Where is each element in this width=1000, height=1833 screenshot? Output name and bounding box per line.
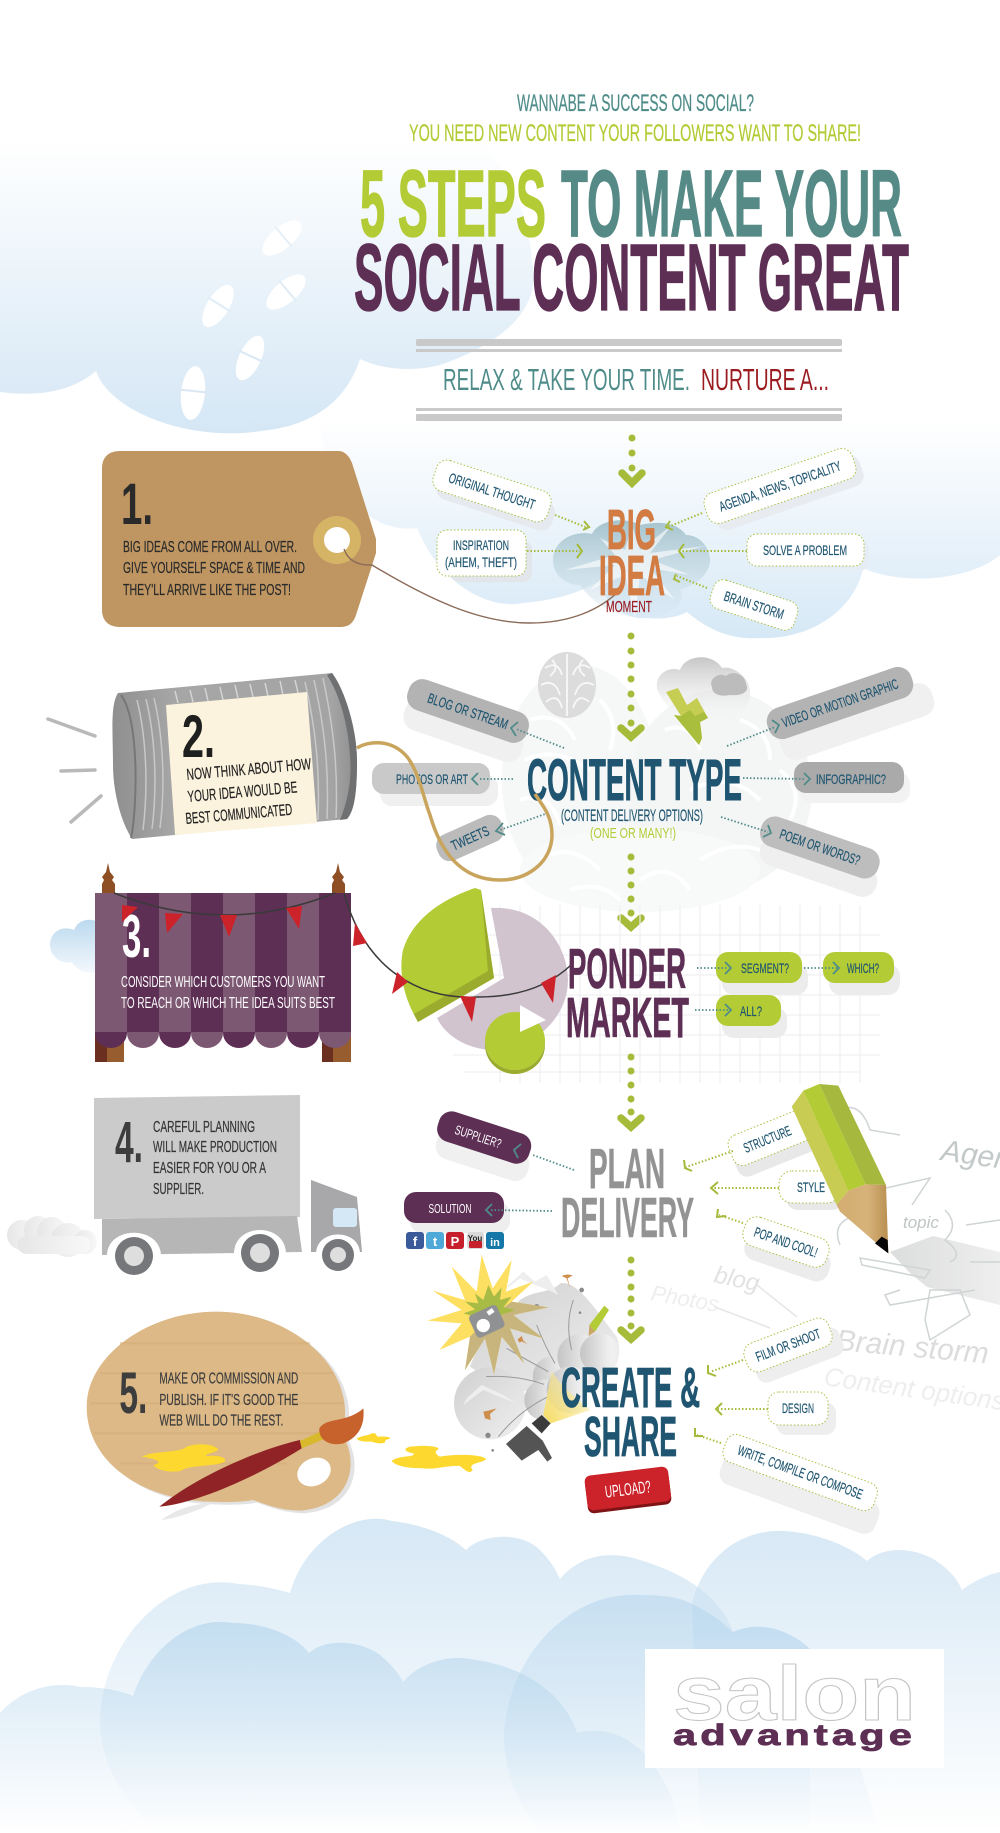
text: PONDER — [568, 937, 686, 1001]
content type heading: (ONE OR MANY!) — [590, 825, 676, 842]
step 4 text: EASIER FOR YOU OR A — [153, 1160, 266, 1177]
button: upload: UPLOAD? — [604, 1477, 652, 1502]
title — [354, 151, 909, 331]
arrow: to plan delivery — [621, 1054, 641, 1127]
bubble: film or shoot: FILM OR SHOOT — [753, 1325, 823, 1365]
bubble: agenda news topicality — [701, 444, 867, 535]
step 1 tag — [102, 451, 376, 627]
icon: storm cloud with lightning — [657, 657, 750, 745]
pill: which: WHICH? — [847, 960, 879, 976]
bubble: agenda news topicality: AGENDA, NEWS, TOPICALITY — [717, 457, 844, 514]
content type heading — [527, 748, 742, 842]
step 5 number: 5. — [119, 1362, 147, 1426]
bubble: infographic: INFOGRAPHIC? — [816, 771, 886, 787]
social icons: in — [490, 1237, 500, 1249]
sketch background: blog — [712, 1261, 762, 1297]
bubble: style — [779, 1171, 844, 1210]
pill: all: ALL? — [740, 1003, 762, 1019]
step 1 text: GIVE YOURSELF SPACE & TIME AND — [123, 560, 305, 577]
can string — [357, 743, 552, 880]
small cloud behind stall — [50, 920, 96, 973]
bubble: design: DESIGN — [782, 1400, 814, 1416]
sketch background: Brain storm — [834, 1324, 990, 1370]
bubble: write compile compose: WRITE, COMPILE OR COMPOSE — [736, 1442, 865, 1502]
step 4 smoke — [7, 1216, 97, 1257]
pill: segment — [716, 952, 808, 995]
subheading band — [416, 339, 842, 421]
pill: all — [716, 995, 787, 1038]
bubble: poem or words — [750, 813, 887, 901]
bubble: original thought — [428, 457, 561, 534]
step 4 truck — [94, 1095, 362, 1275]
tacks — [483, 1274, 573, 1420]
stall scallops — [95, 1032, 351, 1048]
subheading band: RELAX & TAKE YOUR TIME. — [443, 362, 690, 397]
bubble: pop and cool: POP AND COOL! — [752, 1224, 820, 1260]
bubble: blog or stream — [397, 675, 534, 766]
text: CREATE & — [561, 1356, 700, 1420]
bubble: video or motion graphic: VIDEO OR MOTION GRAPHIC — [780, 676, 900, 730]
bubble: film or shoot — [741, 1312, 847, 1387]
bubble: brain storm — [708, 577, 800, 633]
bubble: tweets — [432, 811, 508, 865]
bubble: photos or art: PHOTOS OR ART — [396, 771, 468, 787]
background: market grid — [453, 905, 880, 1083]
bubble: blog or stream: BLOG OR STREAM — [426, 690, 510, 732]
camera — [468, 1304, 506, 1339]
sketch background: topic — [903, 1213, 939, 1232]
icon: small brain — [538, 652, 596, 718]
icon: pencil — [792, 1084, 888, 1253]
string from tag — [344, 549, 620, 623]
pill: solution — [404, 1192, 510, 1233]
title: 5 STEPS — [360, 151, 546, 257]
pill: supplier: SUPPLIER? — [453, 1122, 503, 1151]
icon: paint brush — [159, 1408, 364, 1520]
step 4 text: SUPPLIER. — [153, 1181, 204, 1198]
step 3 text: CONSIDER WHICH CUSTOMERS YOU WANT — [121, 974, 325, 991]
arrows: create and share options — [695, 1360, 768, 1443]
step 3 text — [121, 974, 335, 1012]
bubble: inspiration — [437, 530, 532, 582]
subheading band: NURTURE A... — [701, 362, 829, 397]
bubble: inspiration: (AHEM, THEFT) — [445, 554, 517, 570]
pill: which — [823, 952, 900, 995]
arrow: to content type — [621, 632, 641, 737]
step 4 text: CAREFUL PLANNING — [153, 1119, 255, 1136]
bubble: brain storm: BRAIN STORM — [722, 588, 786, 622]
arrows: content type options — [472, 720, 810, 837]
text: CONTENT TYPE — [527, 748, 742, 813]
step 5 text — [159, 1370, 298, 1430]
logo: salon advantage: salon — [673, 1651, 916, 1737]
bubble: structure — [725, 1106, 823, 1180]
step 2 text — [185, 756, 312, 828]
can sound lines — [48, 719, 101, 822]
debris details — [463, 1272, 558, 1405]
step 3 text: TO REACH OR WHICH THE IDEA SUITS BEST — [121, 995, 335, 1012]
big idea heading: BIG — [607, 498, 656, 562]
text: IDEA — [599, 544, 665, 608]
truck wheels — [115, 1234, 354, 1275]
step 2 text: BEST COMMUNICATED — [185, 802, 293, 828]
sketch background — [649, 1108, 1000, 1416]
big idea burst cloud — [553, 520, 710, 618]
background: top sky cloud — [0, 90, 534, 433]
step 5 text: PUBLISH. IF IT'S GOOD THE — [159, 1392, 298, 1409]
big idea heading — [599, 498, 665, 616]
arrows: market options — [695, 962, 839, 1016]
bubble: design — [768, 1392, 836, 1435]
step 4 number: 4. — [115, 1110, 143, 1175]
plan delivery heading — [561, 1137, 694, 1250]
pill: solution: SOLUTION — [428, 1201, 472, 1216]
arrows: big idea inputs — [527, 513, 747, 588]
smoke clouds — [454, 1283, 620, 1439]
spotlight — [543, 1372, 590, 1423]
bubble: photos or art — [372, 763, 498, 806]
bubble: solve a problem: SOLVE A PROBLEM — [763, 542, 847, 558]
starburst — [427, 1255, 548, 1374]
button: upload — [584, 1466, 672, 1514]
social icons — [406, 1232, 504, 1249]
bubble: pop and cool — [735, 1213, 838, 1285]
bubble: solve a problem — [747, 534, 869, 571]
step 1 text: THEY'LL ARRIVE LIKE THE POST! — [123, 582, 291, 599]
bubble: poem or words: POEM OR WORDS? — [778, 826, 862, 868]
social icons: P — [451, 1234, 460, 1249]
bubble: write compile compose — [713, 1432, 889, 1537]
bubble: tweets: TWEETS — [448, 823, 492, 853]
step 1 number: 1. — [121, 472, 153, 537]
arrow: to big idea — [622, 434, 642, 483]
bubble: original thought: ORIGINAL THOUGHT — [447, 469, 538, 513]
ponder market heading: MARKET — [566, 986, 689, 1050]
create and share heading: SHARE — [584, 1405, 677, 1469]
social icons: You — [468, 1234, 482, 1243]
step 2 text: NOW THINK ABOUT HOW — [186, 756, 312, 784]
stall legs — [95, 1033, 351, 1062]
step 5 text: MAKE OR COMMISSION AND — [159, 1370, 298, 1387]
step 4 text: WILL MAKE PRODUCTION — [153, 1139, 277, 1156]
plan delivery heading: PLAN — [589, 1137, 665, 1201]
step 5 palette — [87, 1312, 355, 1513]
logo: salon advantage: advantage — [673, 1719, 916, 1752]
bubble: inspiration: INSPIRATION — [453, 537, 509, 553]
background: faint brain — [502, 665, 812, 912]
text: DELIVERY — [561, 1186, 694, 1250]
step 2 number: 2. — [182, 703, 215, 770]
arrow: to ponder market — [621, 854, 641, 927]
bubble: structure: STRUCTURE — [741, 1122, 793, 1156]
social icons: t — [433, 1234, 438, 1249]
arrow: to create and share — [621, 1256, 641, 1339]
pie chart — [401, 888, 568, 1074]
bubble: style: STYLE — [797, 1179, 825, 1195]
can label — [166, 692, 317, 835]
intro heading — [409, 90, 861, 147]
stall posts — [102, 863, 345, 893]
intro heading: WANNABE A SUCCESS ON SOCIAL? — [517, 90, 754, 117]
background: cloud behind step one — [319, 420, 1000, 638]
arrows: plan delivery right — [684, 1151, 779, 1223]
bunting — [114, 893, 571, 1022]
background: bottom clouds — [0, 1519, 1000, 1833]
content type heading: (CONTENT DELIVERY OPTIONS) — [561, 806, 703, 825]
sketch background: Photos — [649, 1280, 721, 1317]
step 4 text — [153, 1119, 277, 1198]
step 1 text — [123, 539, 305, 599]
big idea heading: MOMENT — [606, 599, 652, 616]
step 3 number: 3. — [122, 903, 151, 970]
pill: segment: SEGMENT? — [741, 960, 789, 976]
logo: salon advantage — [645, 1649, 944, 1768]
pill: supplier — [428, 1108, 538, 1185]
paint splats — [142, 1433, 486, 1472]
step 2 can — [112, 673, 357, 839]
social icons: f — [413, 1234, 418, 1249]
bubble: infographic — [794, 762, 910, 803]
icon: explosion — [427, 1255, 620, 1462]
arrows: plan delivery left — [486, 1144, 574, 1216]
footprints icon trail — [177, 213, 313, 421]
step 2 text: YOUR IDEA WOULD BE — [187, 779, 298, 806]
bubble: video or motion graphic — [763, 659, 938, 766]
step 1 text: BIG IDEAS COME FROM ALL OVER. — [123, 539, 297, 556]
step 3 stall — [95, 863, 351, 1062]
ponder market heading — [566, 937, 689, 1050]
step 5 text: WEB WILL DO THE REST. — [159, 1413, 283, 1430]
small pencil — [589, 1306, 609, 1332]
create and share heading — [561, 1356, 700, 1469]
